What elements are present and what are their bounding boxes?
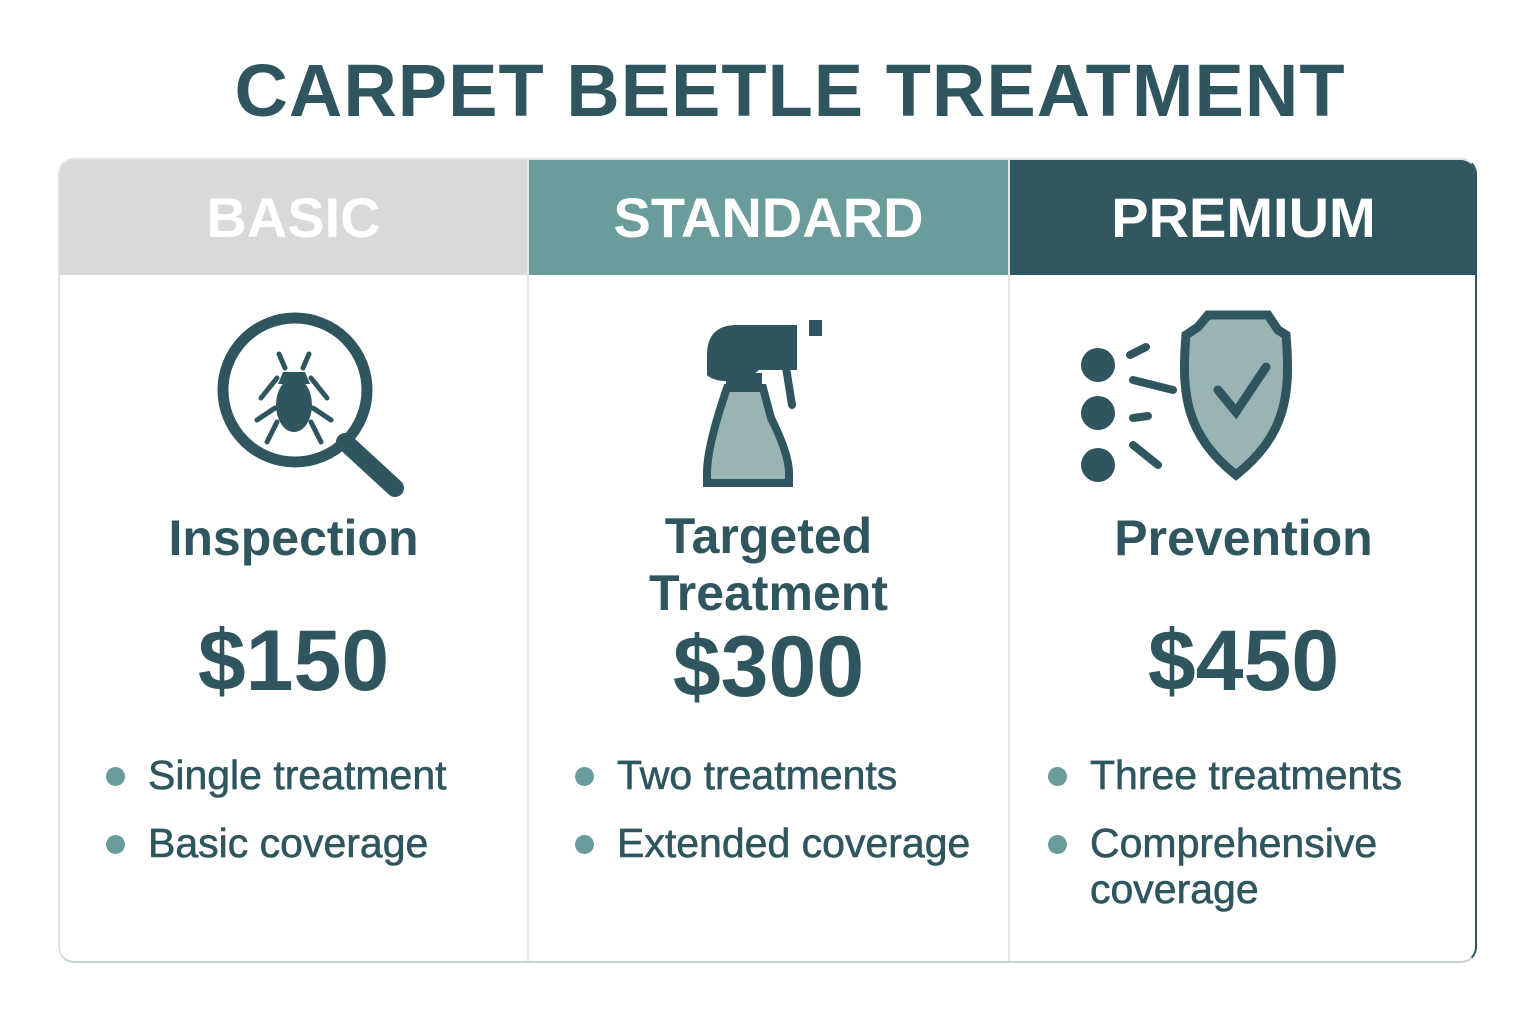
price: 450: $450 xyxy=(1148,613,1339,709)
features: premium: Comprehensive xyxy=(1090,820,1377,866)
features: premium: Three treatments xyxy=(1090,752,1402,798)
features: premium xyxy=(1048,752,1402,912)
header: basic: BASIC xyxy=(206,186,381,249)
features: basic xyxy=(106,752,447,866)
panel: basic xyxy=(60,160,529,963)
icon: shield spray xyxy=(1081,310,1292,482)
header: standard xyxy=(529,160,1008,275)
pricing table xyxy=(58,158,1477,963)
price: 300: $300 xyxy=(673,619,864,715)
features: premium: coverage xyxy=(1090,866,1259,912)
features: standard: Extended coverage xyxy=(617,820,970,866)
heading: targeted treatment: Targeted xyxy=(665,508,872,564)
heading: inspection: Inspection xyxy=(168,510,419,566)
features: standard: Two treatments xyxy=(617,752,897,798)
header: basic xyxy=(60,160,527,275)
header: premium: PREMIUM xyxy=(1111,186,1376,249)
heading: targeted treatment: Treatment xyxy=(649,565,888,621)
features: standard xyxy=(575,752,970,866)
header: standard: STANDARD xyxy=(613,186,924,249)
price: 150: $150 xyxy=(198,613,389,709)
features: basic: Basic coverage xyxy=(148,820,428,866)
features: basic: Single treatment xyxy=(148,752,447,798)
panel: premium xyxy=(1010,160,1475,912)
panel: standard xyxy=(529,160,1010,963)
title: CARPET BEETLE TREATMENT xyxy=(234,49,1346,132)
icon: magnifier beetle xyxy=(218,312,404,497)
icon: spray bottle xyxy=(703,320,822,487)
heading: prevention: Prevention xyxy=(1114,510,1373,566)
heading: targeted treatment xyxy=(649,508,888,621)
header: premium xyxy=(1010,160,1477,275)
